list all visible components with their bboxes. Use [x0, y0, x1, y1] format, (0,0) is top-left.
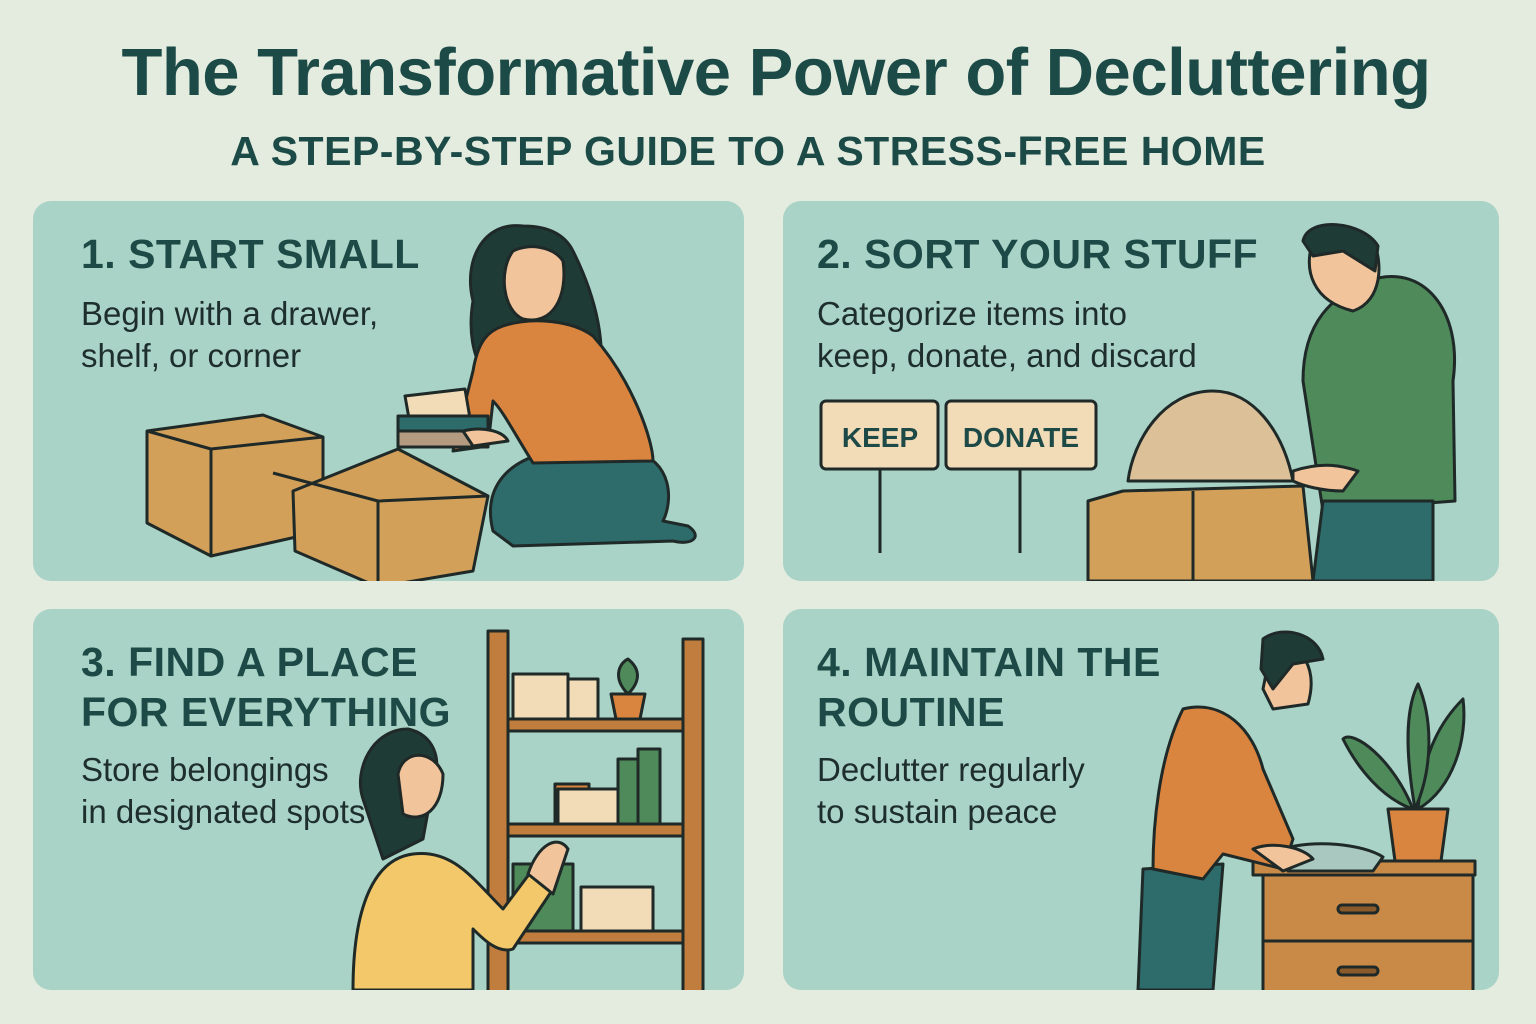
- illustration: signs, box, man: DONATE: [963, 422, 1079, 453]
- panel: find a place: [33, 609, 744, 990]
- heading: 3. FIND A PLACE: [81, 639, 418, 685]
- text: [81, 295, 378, 374]
- text: Store belongings: [81, 751, 329, 788]
- heading: FOR EVERYTHING: [81, 689, 451, 735]
- text: keep, donate, and discard: [817, 337, 1197, 374]
- text: [817, 295, 1197, 374]
- subtitle: A STEP-BY-STEP GUIDE TO A STRESS-FREE HOME: [230, 128, 1266, 174]
- text: in designated spots: [81, 793, 365, 830]
- text: [81, 751, 365, 830]
- heading: 1. START SMALL: [81, 231, 420, 277]
- text: Begin with a drawer,: [81, 295, 378, 332]
- illustration: boxes and woman: [146, 224, 697, 581]
- text: [817, 751, 1085, 830]
- heading: [81, 639, 451, 735]
- panel: start small: [33, 201, 744, 581]
- panel: sort your stuff: [783, 201, 1499, 581]
- illustration: shelf and woman: [352, 630, 704, 990]
- heading: [817, 639, 1161, 735]
- illustration: man, dresser, plant: [1136, 630, 1476, 990]
- text: to sustain peace: [817, 793, 1057, 830]
- text: shelf, or corner: [81, 337, 301, 374]
- heading: ROUTINE: [817, 689, 1005, 735]
- illustration: signs, box, man: [820, 223, 1456, 581]
- heading: 2. SORT YOUR STUFF: [817, 231, 1258, 277]
- panel: maintain routine: [783, 609, 1499, 990]
- title: The Transformative Power of Decluttering: [121, 35, 1431, 110]
- text: Categorize items into: [817, 295, 1127, 332]
- text: Declutter regularly: [817, 751, 1085, 788]
- illustration: signs, box, man: KEEP: [842, 422, 918, 453]
- heading: 4. MAINTAIN THE: [817, 639, 1161, 685]
